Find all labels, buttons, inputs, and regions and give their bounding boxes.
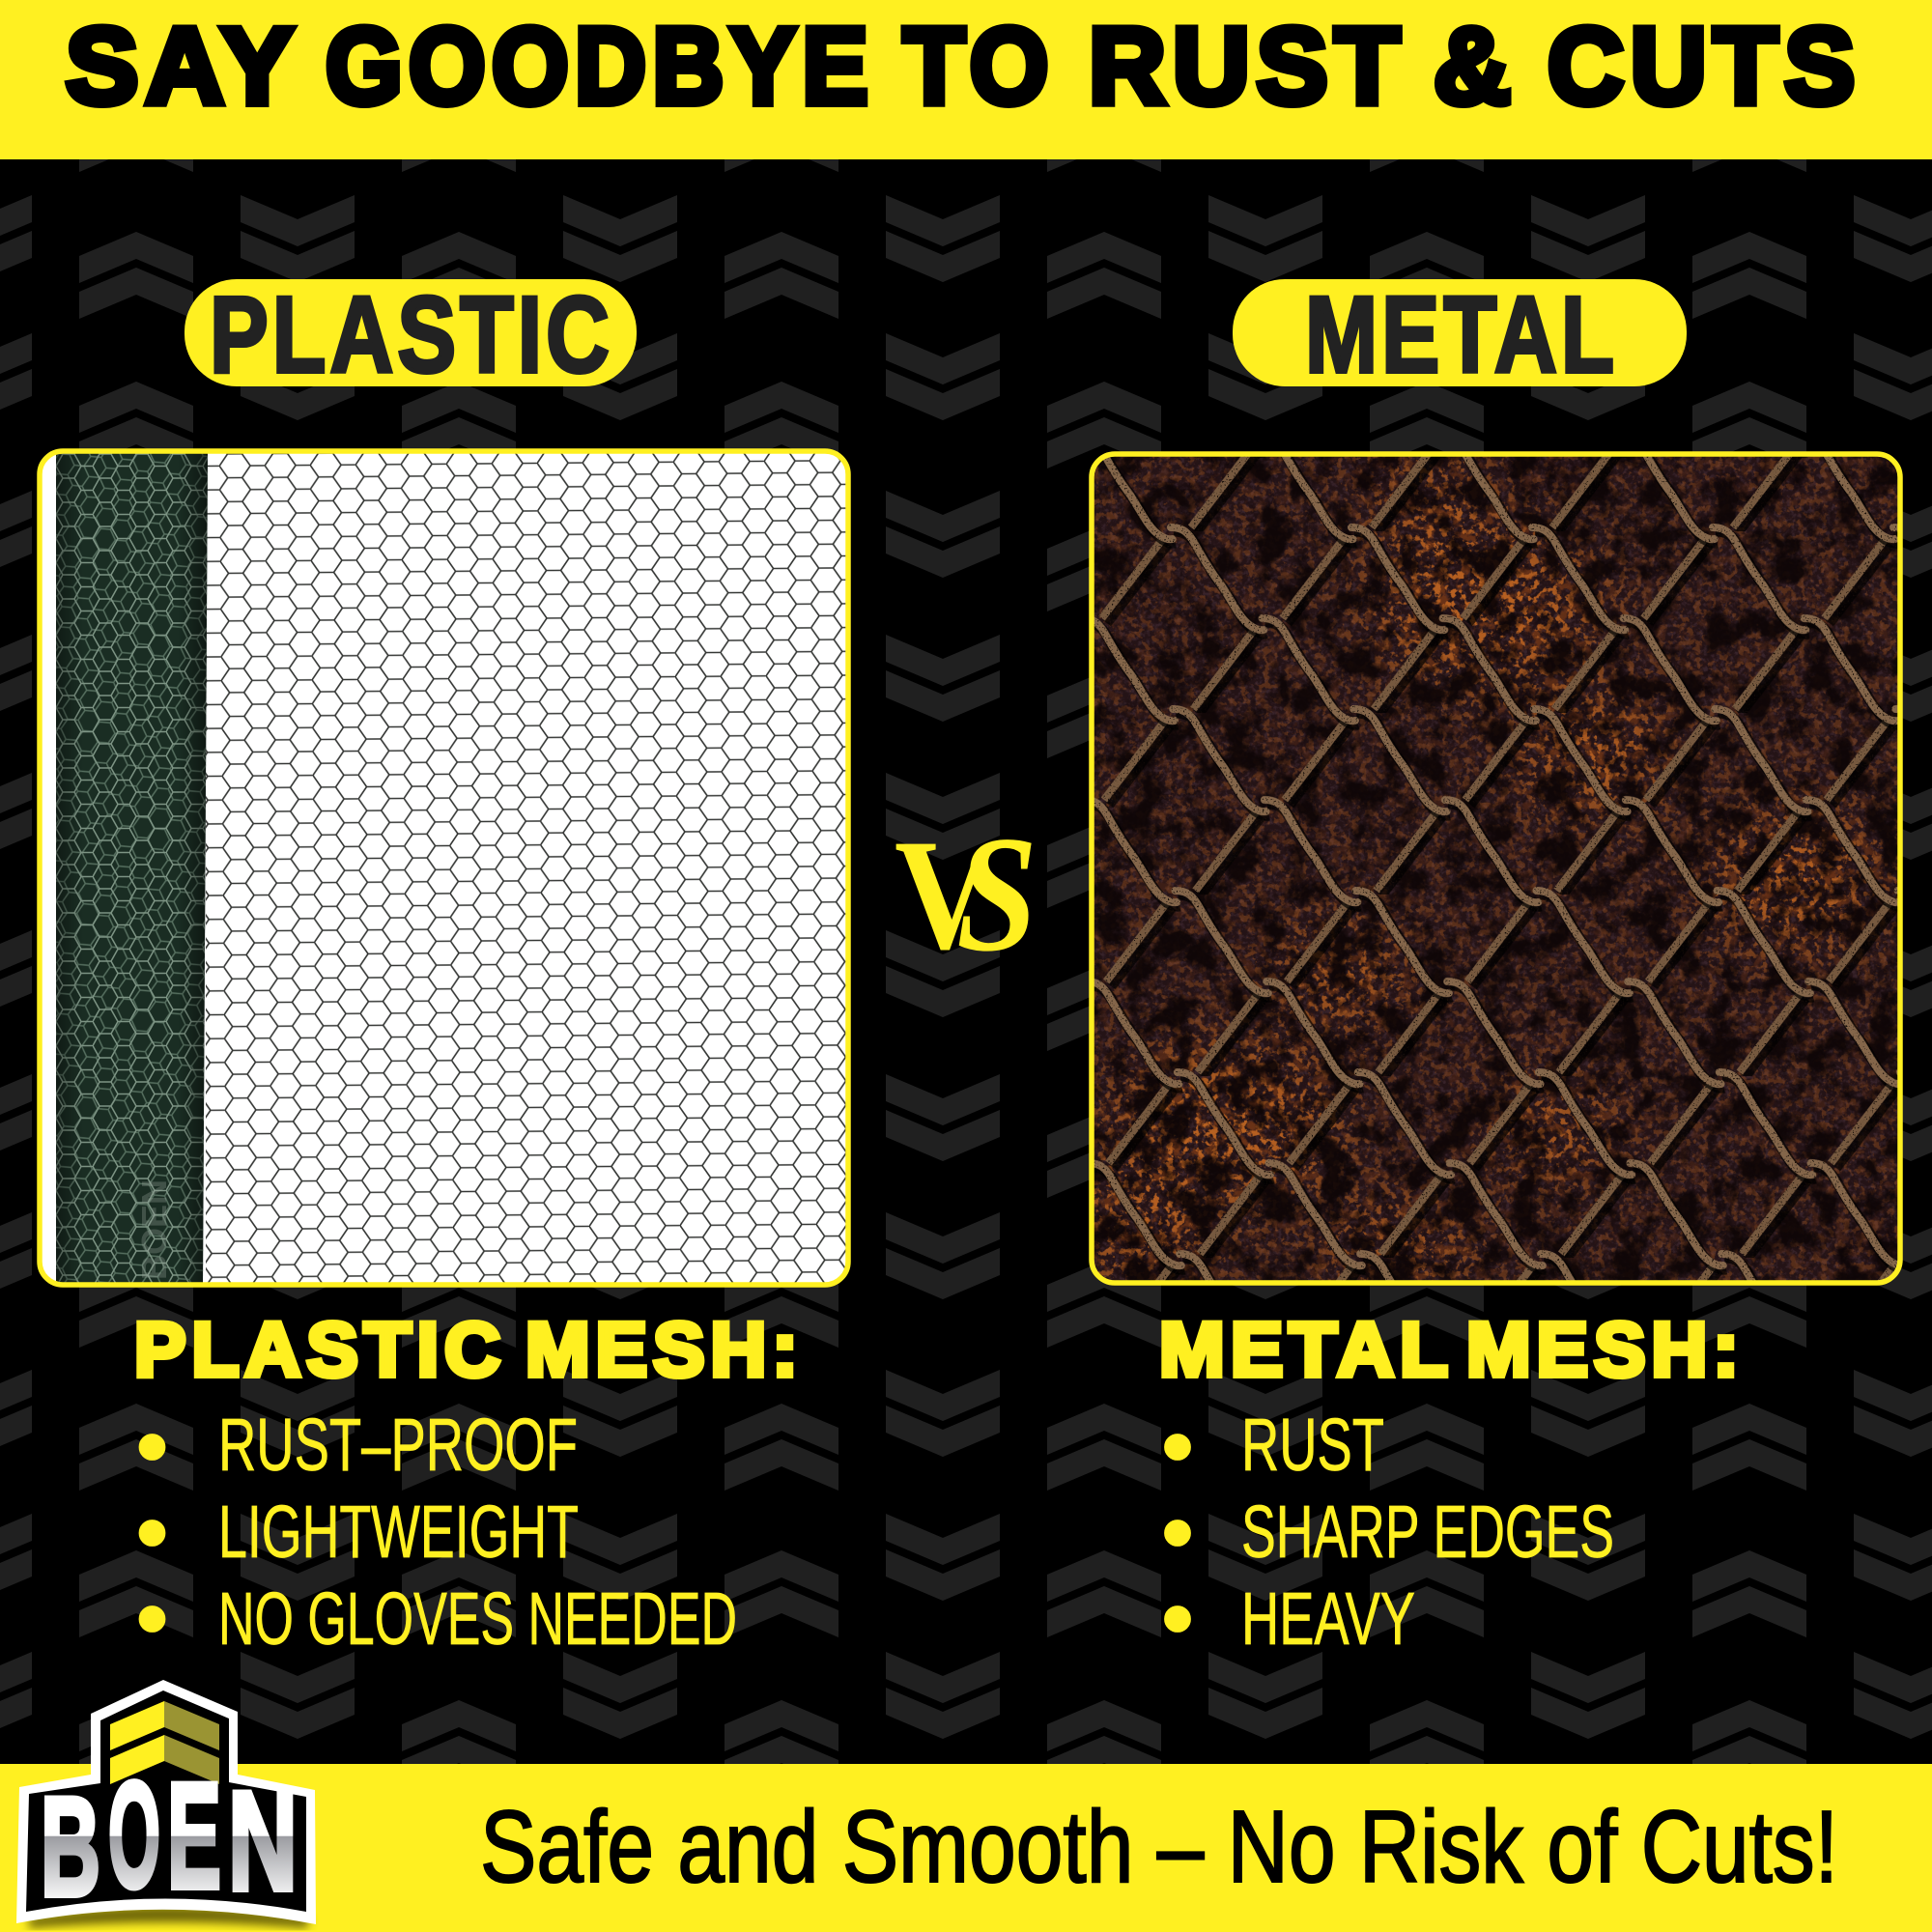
metal mesh drawbacks list: SHARP EDGES [1241,1491,1614,1574]
plastic mesh benefits list: LIGHTWEIGHT [218,1491,579,1574]
plastic mesh benefits list [139,1404,737,1661]
metal mesh drawbacks list [1165,1404,1614,1661]
title banner [0,0,1932,159]
panel: plastic mesh photo [40,451,848,1285]
versus mark: V [895,808,995,982]
versus mark [896,839,1032,952]
metal mesh drawbacks list: RUST [1241,1404,1384,1487]
plastic mesh benefits list: NO GLOVES NEEDED [218,1577,737,1661]
BOEN logo: O [108,1751,160,1919]
rust texture [1092,454,1900,1283]
title banner: CUTS [1548,6,1861,127]
title banner: GOODBYE [326,6,874,127]
chain-link wires [1092,454,1900,1283]
plastic mesh benefits list: RUST–PROOF [218,1404,578,1487]
title banner: & [1434,6,1518,127]
BOEN logo [16,1680,316,1928]
metal mesh drawbacks list: HEAVY [1241,1577,1415,1661]
metal mesh heading: METAL [1159,1306,1454,1392]
versus mark: S [956,803,1037,986]
BOEN logo: N [228,1762,298,1919]
flat hexagonal mesh [206,451,848,1285]
BOEN logo: E [167,1752,221,1920]
metal mesh heading: MESH: [1466,1306,1745,1392]
title banner: TO [903,6,1055,127]
rolled green mesh [56,451,208,1285]
BOEN logo: B [41,1768,100,1925]
plastic mesh heading [134,1306,804,1392]
panel: rusty metal chain-link photo [1092,454,1900,1283]
title banner: SAY [66,6,300,127]
title banner: RUST [1089,6,1406,127]
rolled green mesh: BOEN [134,1179,174,1280]
metal mesh heading [1159,1306,1745,1392]
bottom banner [0,1764,1932,1932]
plastic mesh heading: MESH: [526,1306,804,1392]
plastic mesh heading: PLASTIC [134,1306,506,1392]
plastic label pill: PLASTIC [210,274,613,395]
metal label pill: METAL [1305,274,1618,395]
